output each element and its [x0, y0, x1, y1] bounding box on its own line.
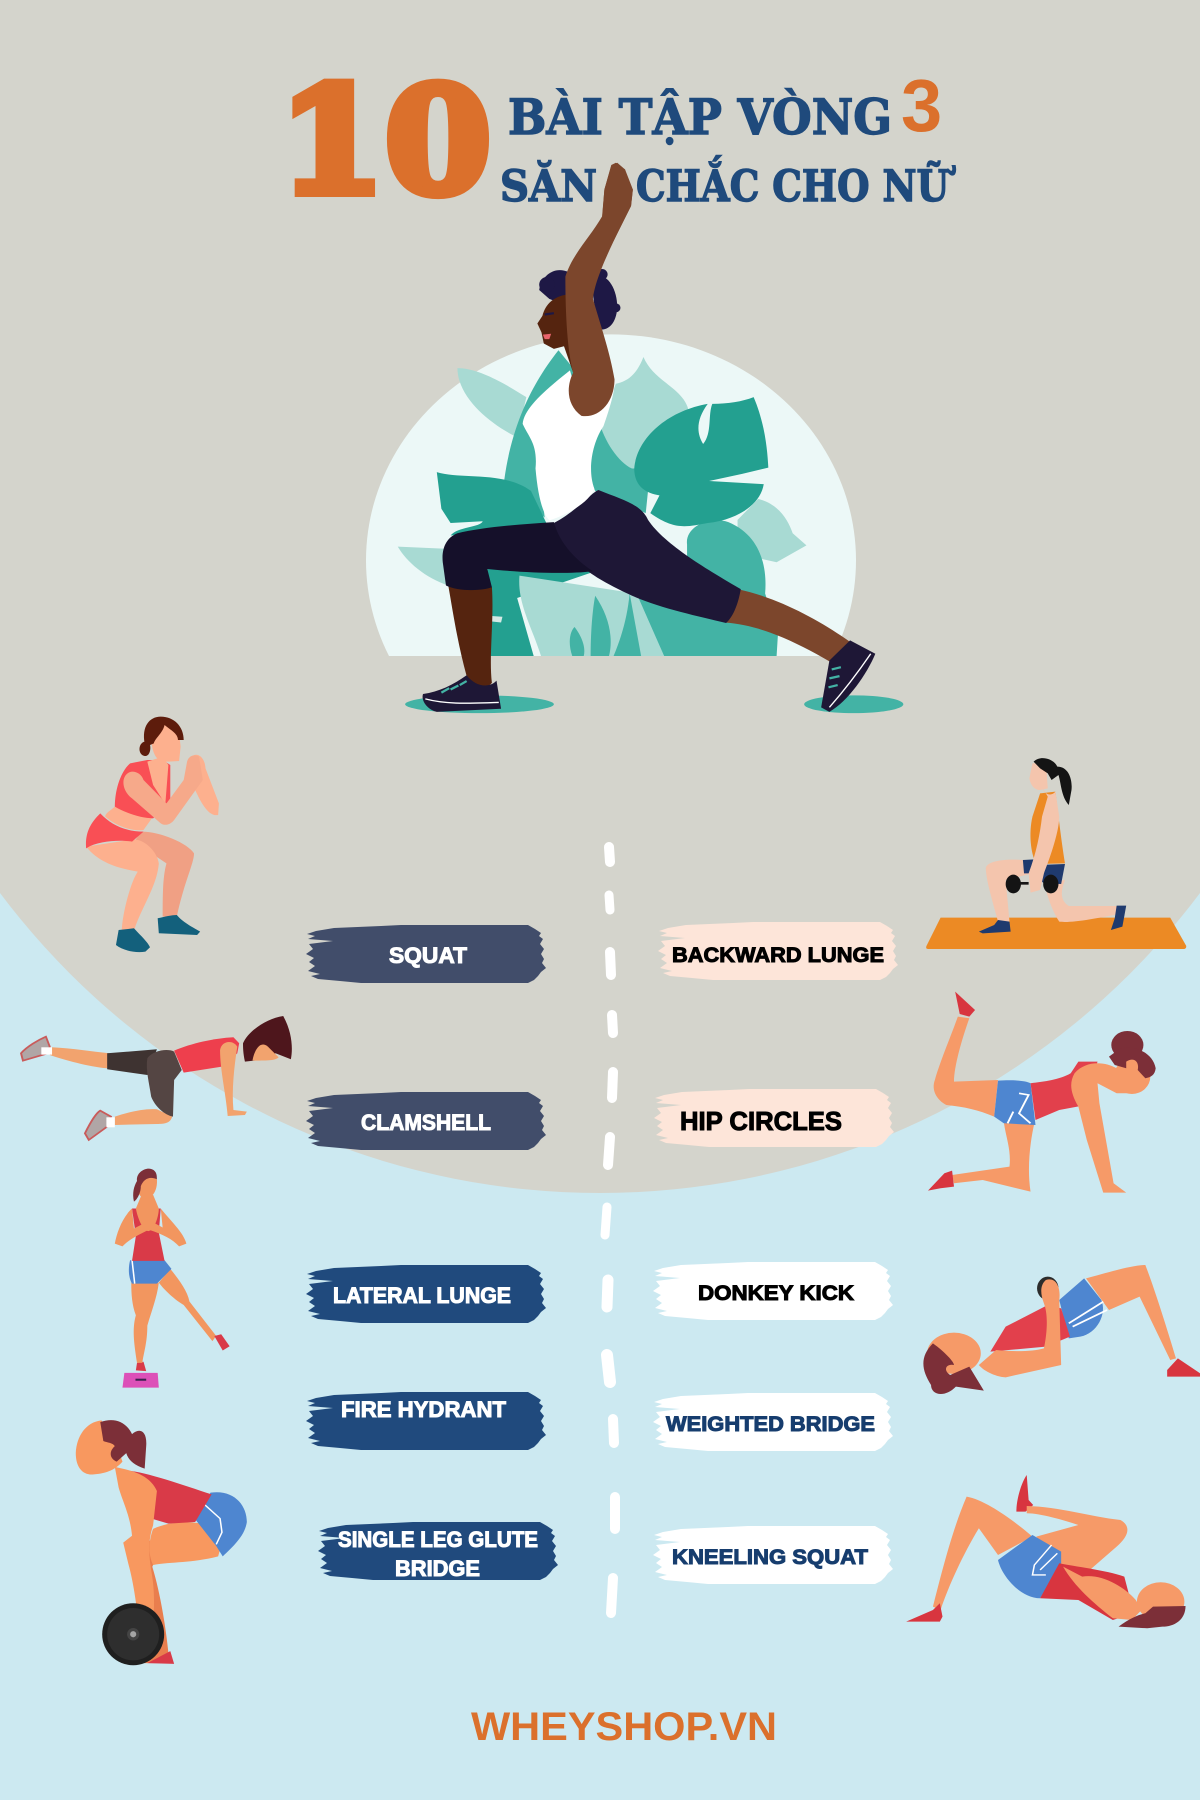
icon: raised hand over title: [600, 163, 633, 241]
footer: brand: WHEYSHOP.VN: [471, 1705, 777, 1749]
label: single leg glute bridge: BRIDGE: [395, 1556, 480, 1581]
label: fire hydrant: FIRE HYDRANT: [341, 1397, 507, 1422]
weight plate: [102, 1603, 164, 1665]
illustration: backward lunge woman on mat: [926, 758, 1186, 949]
label: kneeling squat: [653, 1526, 893, 1584]
label: weighted bridge: [653, 1393, 893, 1451]
label: backward lunge: [658, 922, 898, 980]
sun backdrop: [366, 334, 856, 656]
number 10: 10: [279, 56, 491, 227]
heading line 2 left: SĂN: [500, 160, 597, 212]
dashed centre line: [605, 847, 615, 1613]
label: single leg glute bridge: SINGLE LEG GLUTE: [338, 1527, 538, 1552]
illustration: single leg glute bridge: [906, 1475, 1186, 1628]
label: clamshell: CLAMSHELL: [361, 1110, 491, 1135]
illustration: lateral lunge woman on step: [115, 1169, 230, 1388]
shadows: [405, 695, 554, 713]
label: weighted bridge: WEIGHTED BRIDGE: [666, 1413, 875, 1436]
hair: [539, 269, 620, 330]
illustration: weighted bridge with ball: [923, 1265, 1200, 1394]
illustration: deadlift woman with weight: [76, 1420, 247, 1665]
woman: [405, 163, 903, 713]
label: squat: [306, 925, 546, 983]
illustration: squat woman: [86, 717, 219, 952]
label: hip circles: [654, 1089, 894, 1147]
label: kneeling squat: KNEELING SQUAT: [672, 1546, 868, 1569]
label: single leg glute bridge: [318, 1522, 558, 1581]
tank top: [523, 370, 615, 520]
number 3: 3: [901, 64, 942, 147]
leaves: [398, 350, 806, 656]
heading line 2 right: CHẮC CHO NỮ: [636, 155, 956, 212]
heading line 1: BÀI TẬP VÒNG: [508, 88, 892, 146]
label: donkey kick: DONKEY KICK: [698, 1282, 854, 1305]
illustration: clamshell woman on all fours: [21, 1016, 292, 1140]
label: lateral lunge: LATERAL LUNGE: [333, 1283, 511, 1308]
background: grey circle: [0, 0, 1200, 1193]
label: lateral lunge: [306, 1265, 546, 1323]
raised arm: [565, 163, 633, 416]
label: hip circles: HIP CIRCLES: [680, 1106, 842, 1136]
illustration: lunge woman with leaves: [366, 163, 903, 713]
label: donkey kick: [653, 1262, 893, 1320]
label: clamshell: [306, 1092, 546, 1150]
label: squat: SQUAT: [389, 943, 468, 968]
title: [279, 56, 956, 227]
dumbbells: [1006, 875, 1021, 893]
head: [537, 290, 581, 373]
illustration: hip circles woman on all fours: [928, 992, 1156, 1193]
label: fire hydrant: [306, 1392, 546, 1450]
label: backward lunge: BACKWARD LUNGE: [672, 944, 884, 967]
